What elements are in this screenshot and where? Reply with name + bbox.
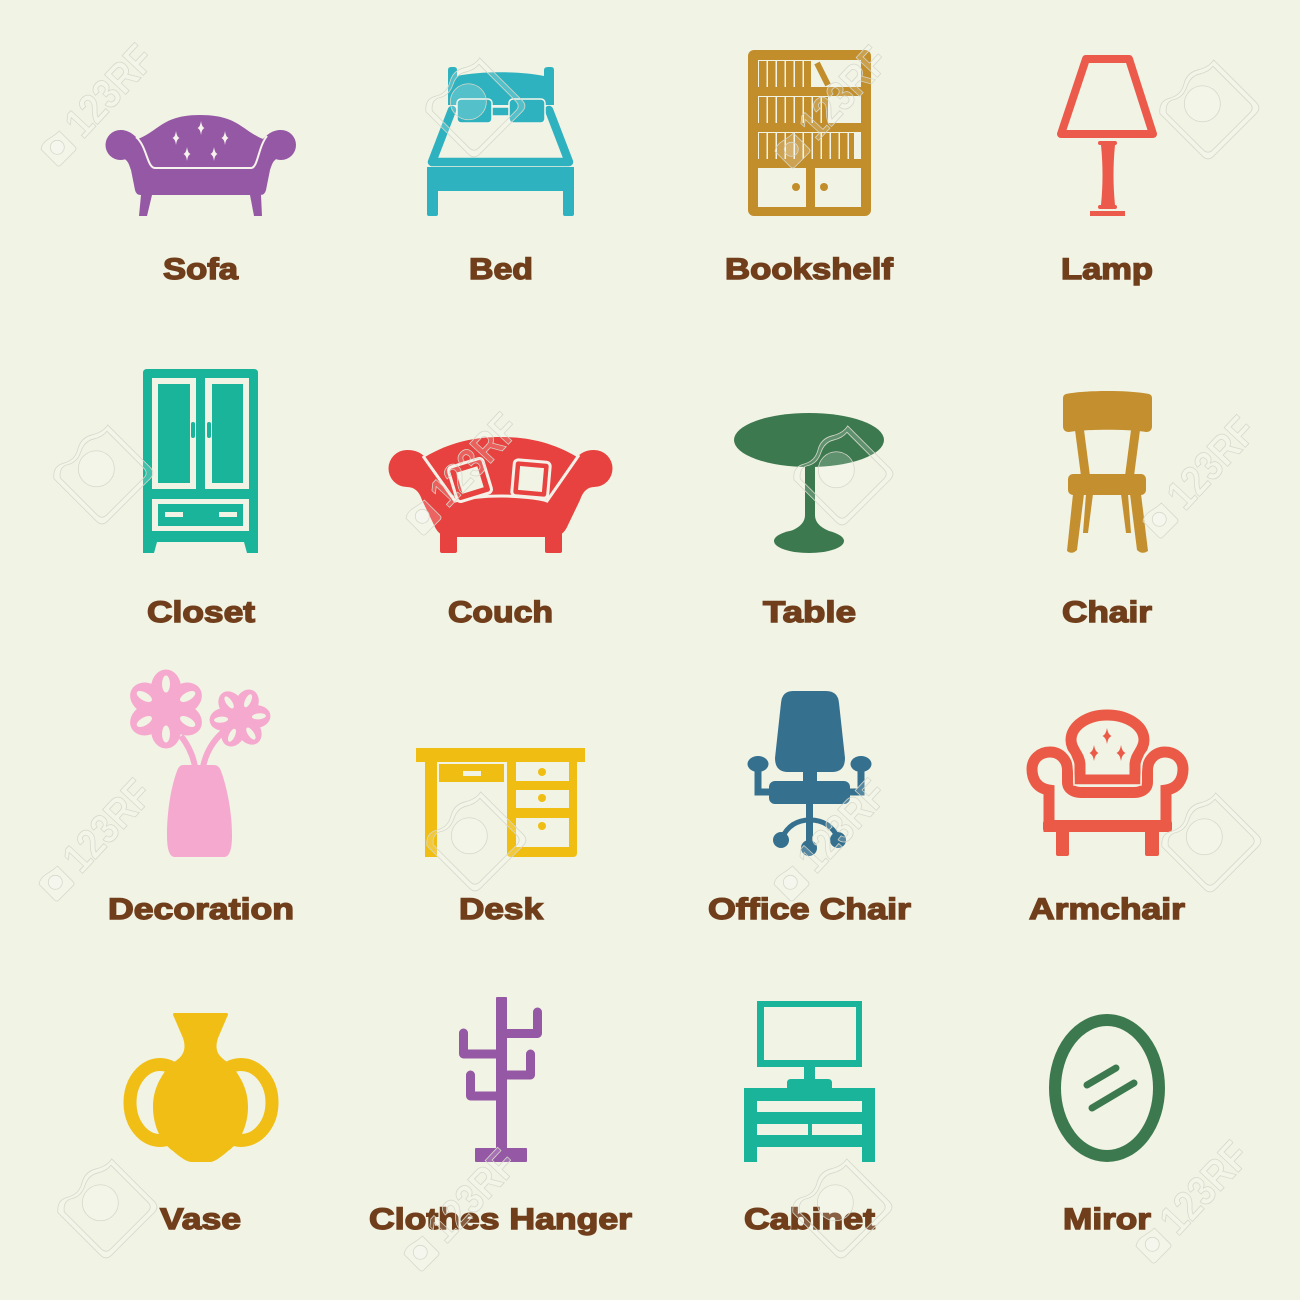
icon: closet — [143, 369, 258, 553]
label: Closet: Closet — [147, 596, 255, 629]
pillow right — [511, 459, 551, 499]
icon: sofa — [106, 115, 296, 216]
label: Couch: Couch — [448, 596, 553, 629]
label: Armchair: Armchair — [1029, 893, 1185, 926]
icon: decoration flowers in vase — [124, 670, 271, 857]
flower large — [124, 670, 208, 748]
label: Miror: Miror — [1063, 1203, 1151, 1236]
watermark: 123RF text marks: 123RF — [1150, 1132, 1258, 1243]
icon: chair — [1063, 391, 1152, 553]
watermark: 123RF text marks: 123RF — [1157, 407, 1265, 518]
label: Office Chair: Office Chair — [708, 893, 911, 926]
icon: cabinet with tv — [744, 1001, 875, 1162]
watermark: 123RF text marks: 123RF — [53, 770, 161, 881]
flower small — [209, 685, 271, 751]
label: Clothes Hanger: Clothes Hanger — [369, 1203, 632, 1236]
label: Decoration: Decoration — [108, 893, 294, 926]
watermark: 123RF text marks: 123RF — [788, 770, 896, 881]
watermark: 123RF text marks: 123RF — [418, 1140, 526, 1251]
icon: clothes hanger — [464, 997, 538, 1162]
watermark: 123RF text marks: 123RF — [55, 35, 163, 146]
label: Sofa: Sofa — [163, 253, 238, 286]
label: Lamp: Lamp — [1061, 253, 1153, 286]
icon: couch — [388, 437, 612, 553]
books on shelves — [759, 61, 854, 159]
label: Bed: Bed — [469, 253, 533, 286]
label: Chair: Chair — [1062, 596, 1152, 629]
watermark: 123RF text marks: 123RF — [420, 404, 528, 515]
icon: armchair — [1032, 715, 1183, 856]
icon: desk — [416, 748, 585, 857]
label: Cabinet: Cabinet — [744, 1203, 875, 1236]
icon: bookshelf — [748, 50, 871, 216]
label: Table: Table — [763, 596, 856, 629]
icon: mirror — [1055, 1020, 1159, 1156]
watermark: 123RF text marks: 123RF — [789, 37, 897, 148]
label: Bookshelf: Bookshelf — [725, 253, 894, 286]
icon: table — [734, 413, 884, 553]
icon: lamp — [1061, 59, 1153, 216]
icon: office chair — [748, 691, 872, 856]
icon: vase — [130, 1013, 272, 1162]
icon: bed — [427, 67, 574, 216]
label: Vase: Vase — [160, 1203, 241, 1236]
label: Desk: Desk — [459, 893, 543, 926]
pillow left — [448, 458, 492, 502]
